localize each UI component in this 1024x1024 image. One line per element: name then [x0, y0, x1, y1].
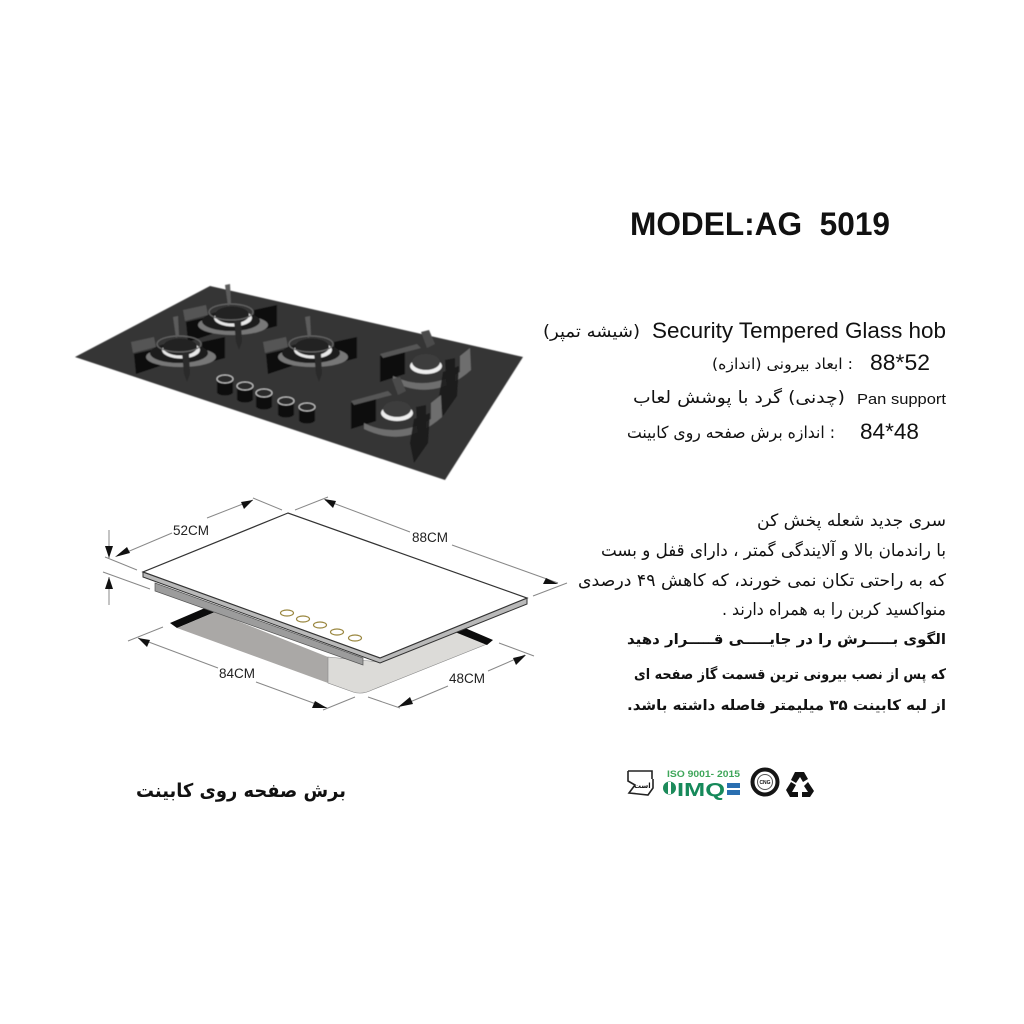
dimension: 88CM: 88CM [412, 530, 448, 545]
description paragraph [578, 511, 947, 620]
cut-out black strip left [170, 608, 215, 628]
dimension: 52CM [105, 498, 282, 570]
description paragraph: با راندمان بالا و آلایندگی گمتر ، دارای قفل و بست [601, 539, 946, 561]
spec: glass type: (شیشه تمپر) [543, 322, 640, 342]
spec: glass type: Security Tempered Glass hob [652, 318, 946, 343]
installation note: که پس از نصب بیرونی ترین قسمت گاز صفحه ای [634, 665, 946, 683]
burner: centre [263, 316, 357, 382]
description paragraph: منواکسید کربن را به همراه دارند . [722, 600, 946, 620]
installation note [627, 630, 946, 714]
specifications text block [543, 318, 946, 444]
burner: front left [131, 316, 225, 382]
diagram: cabinet cut-out dimensions [103, 497, 567, 710]
dimension: 48CM [368, 643, 534, 708]
icon: ISO 9001 IMQ logo [663, 769, 741, 800]
icon: recycle symbol [786, 772, 814, 797]
dimension: thickness arrows [103, 530, 150, 605]
spec: cut-out size: 84*48 [860, 419, 919, 444]
spec: outer dimensions [712, 350, 930, 375]
spec: cut-out size [627, 419, 919, 444]
control knobs [217, 375, 315, 424]
icon: standard mark [628, 771, 653, 795]
image: glass gas hob with five burners [75, 284, 523, 480]
installation note: الگوی بـــــرش را در جایـــــی قـــــرار دهید [627, 630, 946, 648]
icon: standard mark: است [634, 783, 651, 790]
dimension: 84CM [128, 627, 355, 710]
spec: pan support: Pan support [857, 392, 946, 408]
spec: pan support [633, 387, 946, 408]
glass top [143, 513, 527, 658]
icon: ISO 9001 IMQ logo: IMQ [677, 780, 725, 800]
certification logos [628, 769, 814, 800]
spec: outer dimensions: 88*52 [870, 350, 930, 375]
icon: ISO 9001 IMQ logo: ISO 9001- 2015 [667, 769, 741, 780]
dimension: 88CM [295, 497, 567, 596]
caption: برش صفحه روی کابینت [136, 780, 346, 802]
spec: outer dimensions: : ابعاد بیرونی (اندازه) [712, 355, 853, 373]
cut-out side face [328, 632, 487, 693]
burner: front right [351, 377, 442, 463]
spec: pan support: (چدنی) گرد با پوشش لعاب [633, 387, 845, 408]
icon: round certification seal [752, 770, 778, 794]
dimension: 48CM: 48CM [449, 671, 485, 686]
glass edge [143, 572, 527, 663]
installation note: از لبه کابینت ۳۵ میلیمتر فاصله داشته باشد. [627, 698, 946, 714]
spec: cut-out size: : اندازه برش صفحه روی کابینت [627, 423, 835, 443]
hob underside frame [155, 583, 363, 665]
title: MODEL:AG 5019 [630, 206, 890, 242]
dimension: 52CM: 52CM [173, 523, 209, 538]
cut-out front face [177, 612, 328, 683]
burner: back left [183, 284, 277, 350]
burner: back right [380, 330, 471, 416]
cut-out black strip right [455, 628, 493, 645]
description paragraph: سری جدید شعله پخش کن [757, 511, 946, 531]
icon: round certification seal: CNG [759, 780, 771, 786]
hob glass plate [75, 286, 523, 480]
dimension: 84CM: 84CM [219, 666, 255, 681]
description paragraph: که به راحتی تکان نمی خورند، که کاهش ۴۹ درصدی [578, 571, 947, 591]
knob outlines [280, 610, 362, 641]
